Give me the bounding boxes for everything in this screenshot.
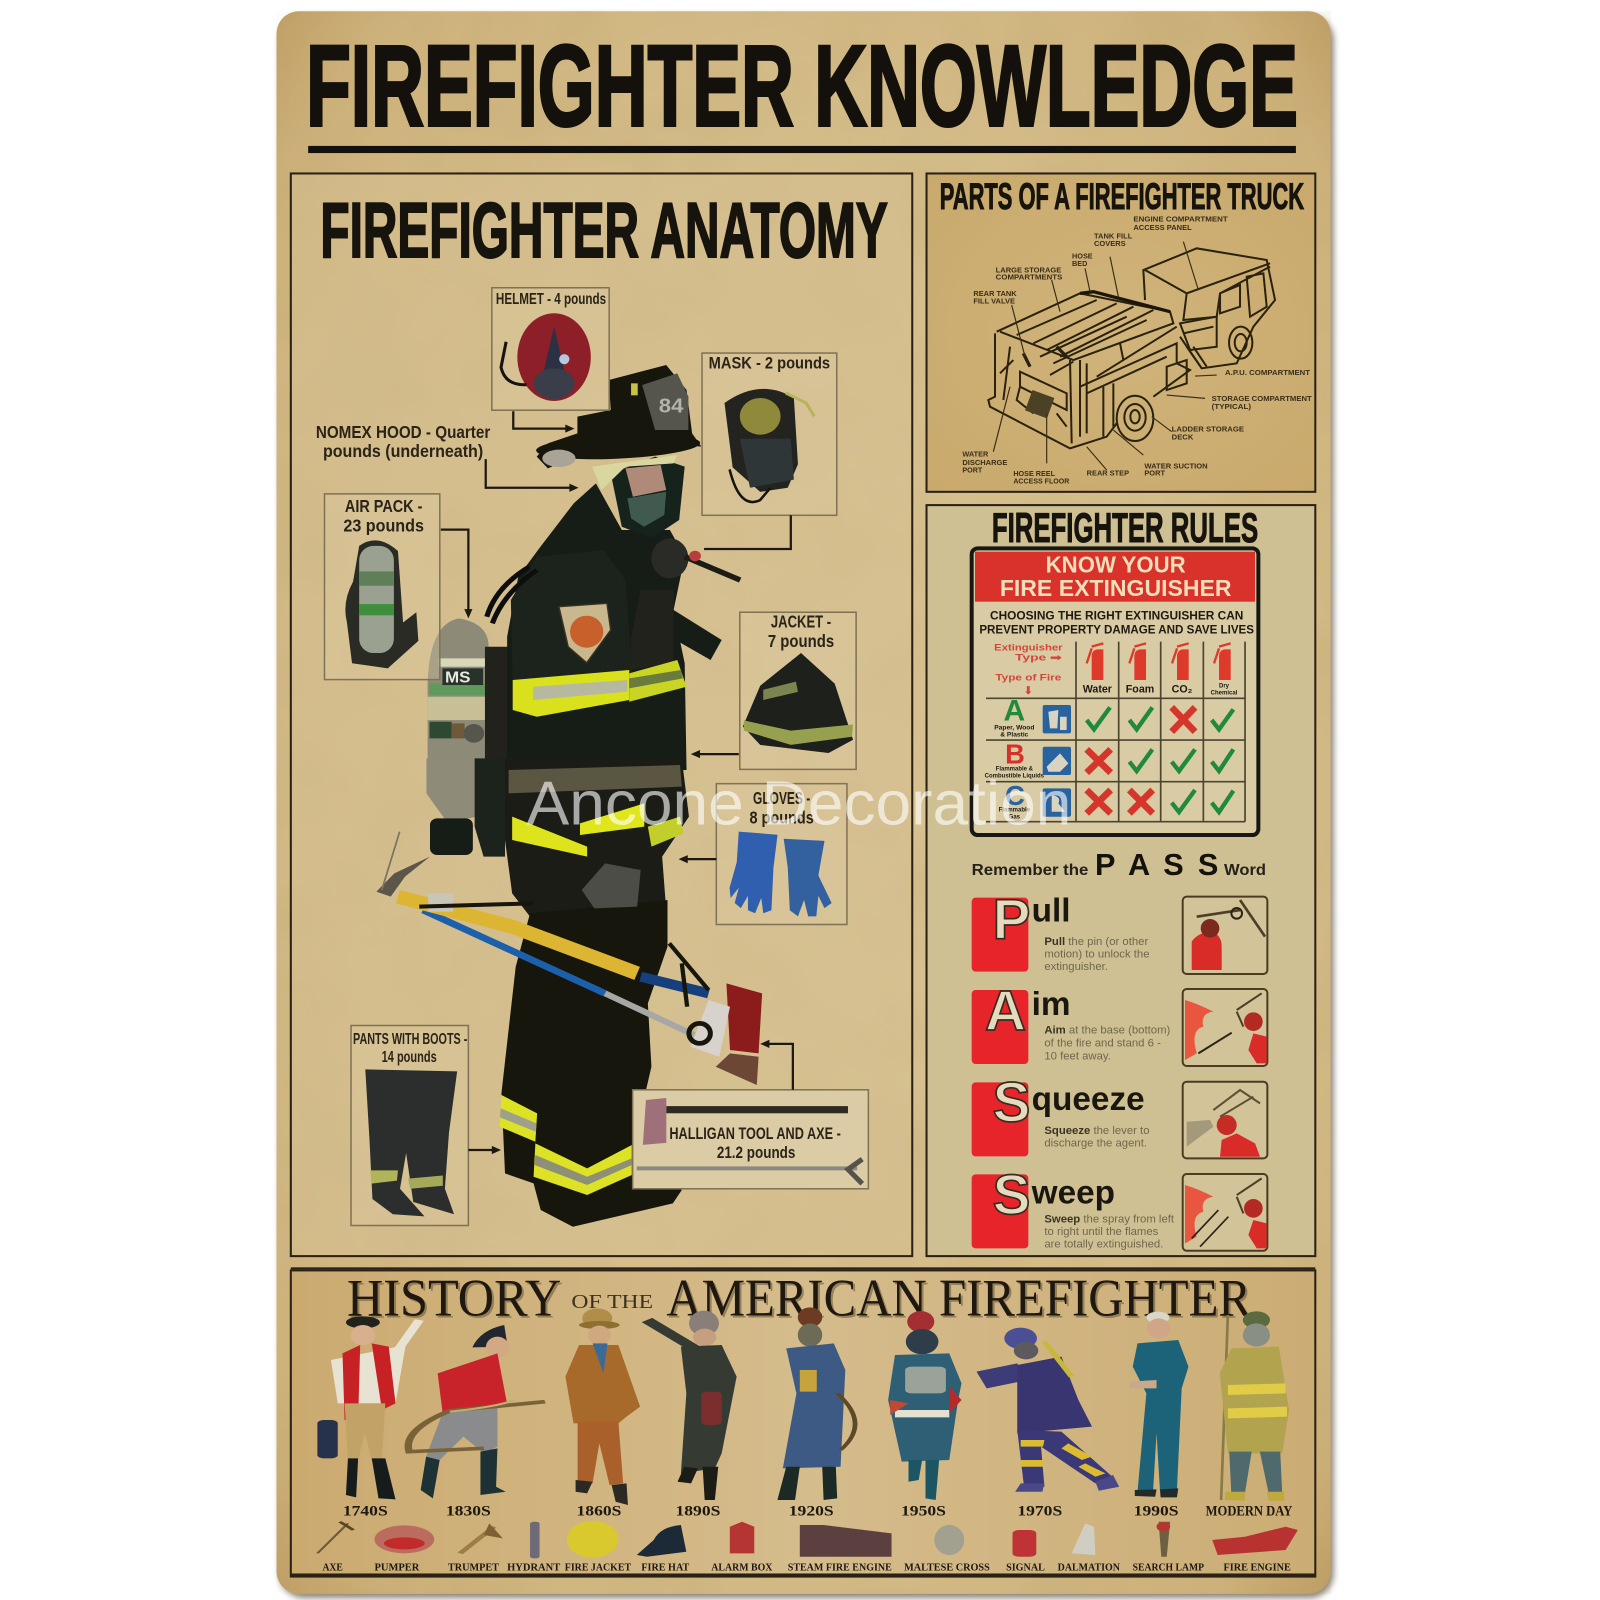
truck part labels: DECK: [1172, 432, 1194, 441]
chart grid: [986, 642, 1245, 822]
chart x marks: [1087, 707, 1195, 813]
artefact labels: FIRE HAT: [641, 1561, 689, 1573]
fire classes: [985, 695, 1045, 820]
truck part labels: TANK FILL: [1094, 231, 1133, 240]
nomex hood label: NOMEX HOOD - Quarter: [316, 422, 491, 442]
truck part labels: DISCHARGE: [962, 458, 1007, 467]
jacket inset: [740, 612, 856, 769]
decade labels: 1890S: [676, 1503, 720, 1519]
heading: history: OF THE: [571, 1291, 653, 1313]
nomex hood label: pounds (underneath): [323, 441, 483, 461]
air pack inset: [324, 494, 440, 680]
pull step: ull: [1032, 893, 1071, 930]
pass mnemonic section: [972, 848, 1267, 1251]
sweep step: weep: [1031, 1174, 1115, 1211]
truck part labels: REAR STEP: [1087, 469, 1129, 478]
chart subtitle: CHOOSING THE RIGHT EXTINGUISHER CAN: [990, 608, 1243, 622]
figure modern day: [1220, 1311, 1289, 1501]
truck part labels: COVERS: [1094, 239, 1126, 248]
tank base: [426, 758, 480, 823]
artefact labels: FIRE ENGINE: [1223, 1561, 1291, 1573]
helmet inset: [492, 288, 609, 410]
pull step: extinguisher.: [1044, 961, 1108, 973]
decade labels: MODERN DAY: [1206, 1503, 1293, 1519]
gloves inset: [716, 784, 847, 924]
fire classes: Flammable &: [996, 767, 1034, 773]
aim step: [972, 980, 1267, 1066]
halligan tool and axe inset: [633, 1090, 868, 1189]
gloves inset: GLOVES -: [753, 788, 810, 808]
callout arrows: [441, 411, 793, 1154]
jacket reflective bands: [513, 670, 629, 717]
chart subtitle: [979, 608, 1254, 636]
truck part labels: HOSE: [1072, 251, 1093, 260]
decade labels: [343, 1503, 1293, 1519]
pants with boots inset: [351, 1026, 468, 1226]
squeeze step: Squeeze the lever to: [1044, 1125, 1150, 1137]
watermark: Ancone Decoration: [527, 769, 1071, 838]
lower jacket: [501, 758, 689, 917]
chart check marks: [1087, 707, 1233, 812]
artefact labels: STEAM FIRE ENGINE: [788, 1561, 892, 1573]
truck part labels: PORT: [962, 465, 983, 474]
truck part labels: (TYPICAL): [1212, 402, 1252, 411]
decade labels: 1970S: [1017, 1503, 1062, 1519]
figure 1920s: [777, 1307, 855, 1500]
chart axis labels: Type of Fire: [995, 673, 1061, 683]
air hoses: [487, 567, 537, 623]
chart axis labels: ⬇: [1024, 685, 1033, 697]
panel: history of the american firefighter: [291, 1267, 1315, 1578]
trousers and boots: [501, 900, 682, 1227]
regulator and hose: [651, 538, 688, 578]
helmet: [537, 365, 701, 468]
decade labels: 1740S: [343, 1503, 388, 1519]
artefact labels: HYDRANT: [507, 1561, 560, 1573]
fire class icons: [1043, 705, 1071, 817]
jacket inset: JACKET -: [771, 612, 831, 632]
air pack inset: AIR PACK -: [345, 496, 423, 516]
truck part labels: ENGINE COMPARTMENT: [1133, 215, 1228, 224]
truck part labels: ACCESS PANEL: [1133, 223, 1192, 232]
decade labels: 1920S: [789, 1503, 834, 1519]
axe and halligan tool: [423, 910, 605, 993]
firefighter figure, upper body: MS: [445, 669, 471, 686]
mask inset: MASK - 2 pounds: [709, 354, 830, 372]
panel: parts of a firefighter truck: [927, 173, 1315, 492]
fire classes: C: [1005, 780, 1025, 811]
truck part labels: ACCESS FLOOR: [1013, 476, 1070, 485]
chart axis labels: Extinguisher: [994, 643, 1063, 653]
figure 1890s: [647, 1311, 737, 1500]
fire classes: A: [1004, 695, 1025, 728]
aim step: Aim at the base (bottom): [1044, 1024, 1171, 1036]
panel: firefighter rules: [927, 504, 1315, 1256]
small artefact icons: [317, 1521, 1298, 1558]
gloves inset: 8 pounds: [749, 807, 814, 827]
truck part labels: PORT: [1144, 469, 1166, 478]
heading: history: AMERICAN FIREFIGHTER: [668, 1271, 1254, 1329]
firefighter figure, upper body: 84: [659, 396, 684, 417]
figure 1860s: [565, 1308, 640, 1505]
helmet inset: HELMET - 4 pounds: [496, 291, 606, 308]
artefact labels: ALARM BOX: [711, 1561, 773, 1573]
air tank upper: [428, 618, 492, 770]
firefighter figure, upper body: [428, 365, 740, 770]
artefact labels: TRUMPET: [448, 1561, 499, 1573]
figure 1830s: [408, 1325, 545, 1498]
squeeze step: [972, 1072, 1267, 1158]
mask and hood: [611, 457, 685, 538]
halligan tool and axe inset: HALLIGAN TOOL AND AXE -: [669, 1125, 841, 1143]
sweep step: Sweep the spray from left: [1044, 1213, 1175, 1225]
extinguisher type labels: Dry: [1219, 683, 1230, 689]
heading: history: [347, 1269, 1254, 1329]
jacket inset: 7 pounds: [768, 631, 834, 651]
leg reflective bands: [500, 1095, 537, 1142]
panel: firefighter anatomy: [291, 173, 912, 1256]
pass heading: Remember the: [972, 862, 1088, 879]
decade labels: 1990S: [1134, 1503, 1179, 1519]
leader lines: [993, 242, 1217, 470]
aim step: 10 feet away.: [1044, 1050, 1111, 1062]
nomex hood label: [316, 422, 491, 461]
figure 1740s: [317, 1316, 419, 1499]
heading: truck: PARTS OF A FIREFIGHTER TRUCK: [940, 176, 1304, 217]
artefact labels: AXE: [322, 1561, 343, 1573]
extinguisher type labels: CO₂: [1172, 684, 1193, 696]
pull step: motion) to unlock the: [1044, 949, 1150, 961]
heading: rules: FIREFIGHTER RULES: [992, 504, 1258, 551]
extinguisher type labels: [1083, 683, 1238, 697]
extinguisher type labels: Water: [1083, 684, 1112, 696]
heading: history: AMERICAN FIREFIGHTER: [666, 1269, 1252, 1327]
squeeze step: discharge the agent.: [1044, 1138, 1147, 1150]
fire extinguisher chart: [972, 548, 1258, 835]
fire classes: Gas: [1009, 814, 1021, 820]
pants with boots inset: 14 pounds: [382, 1049, 437, 1066]
figure 1970s: [976, 1328, 1119, 1492]
pull step: Pull the pin (or other: [1044, 936, 1148, 948]
chart red header: [975, 552, 1255, 602]
metal plate background: [277, 11, 1334, 1598]
truck part labels: FILL VALVE: [973, 296, 1015, 305]
pass heading: [972, 848, 1266, 882]
pass heading: Word: [1224, 862, 1266, 879]
pants with boots inset: PANTS WITH BOOTS -: [353, 1031, 467, 1048]
mask inset: [702, 353, 837, 515]
truck part labels: LADDER STORAGE: [1172, 425, 1244, 434]
extinguisher type labels: Chemical: [1211, 691, 1238, 697]
helmet shield: [642, 373, 688, 430]
torso: [507, 483, 687, 770]
artefact labels: MALTESE CROSS: [904, 1561, 990, 1573]
artefact labels: [322, 1561, 1291, 1573]
pull step: [972, 888, 1267, 974]
truck part labels: [962, 215, 1312, 485]
chart axis labels: [994, 643, 1063, 697]
chart red header: FIRE EXTINGUISHER: [1000, 575, 1232, 601]
extinguisher icons: [1087, 643, 1231, 680]
heading: firefighter anatomy: FIREFIGHTER ANATOMY: [320, 188, 888, 274]
truck part labels: BED: [1072, 259, 1087, 268]
sweep step: to right until the flames: [1044, 1226, 1159, 1238]
fire classes: & Plastic: [1000, 732, 1029, 739]
glove: [582, 863, 641, 908]
firefighter figure, lower body: [376, 758, 762, 1227]
aim step: of the fire and stand 6 -: [1044, 1038, 1161, 1050]
artefact labels: DALMATION: [1058, 1561, 1120, 1573]
truck part labels: STORAGE COMPARTMENT: [1212, 394, 1312, 403]
fire classes: Combustible Liquids: [985, 774, 1045, 780]
figure 1950s: [888, 1311, 962, 1500]
fire classes: B: [1005, 738, 1025, 769]
truck part labels: COMPARTMENTS: [996, 272, 1062, 281]
artefact labels: FIRE JACKET: [565, 1561, 631, 1573]
truck part labels: LARGE STORAGE: [996, 265, 1061, 274]
squeeze step: S: [993, 1072, 1030, 1135]
decade labels: 1830S: [446, 1503, 491, 1519]
sweep step: S: [993, 1164, 1030, 1227]
sweep step: [972, 1164, 1267, 1251]
truck line diagram: [962, 215, 1312, 485]
shoulder patch: [559, 603, 611, 663]
heading: history: HISTORY: [349, 1271, 563, 1329]
radio: [670, 610, 722, 660]
truck part labels: WATER SUCTION: [1144, 461, 1208, 470]
figure 1990s: [1129, 1312, 1188, 1497]
axe head: [716, 1053, 759, 1085]
historical figures: [317, 1307, 1298, 1558]
air pack inset: 23 pounds: [343, 516, 424, 536]
truck part labels: REAR TANK: [973, 289, 1017, 298]
fire classes: Flammable: [999, 808, 1031, 814]
chart red header: KNOW YOUR: [1046, 552, 1186, 578]
pass heading: P A S S: [1095, 848, 1218, 882]
decade labels: 1860S: [577, 1503, 621, 1519]
truck part labels: A.P.U. COMPARTMENT: [1225, 368, 1311, 377]
fire classes: Paper, Wood: [994, 724, 1034, 731]
pull step: P: [993, 888, 1030, 951]
truck part labels: HOSE REEL: [1013, 469, 1056, 478]
truck part labels: WATER: [962, 450, 989, 459]
artefact labels: SIGNAL: [1006, 1561, 1045, 1573]
heading: history: HISTORY: [347, 1269, 561, 1327]
squeeze step: queeze: [1032, 1081, 1145, 1118]
extinguisher type labels: Foam: [1126, 684, 1154, 696]
waist bands: [512, 817, 587, 857]
aim step: A: [985, 980, 1026, 1043]
chart subtitle: PREVENT PROPERTY DAMAGE AND SAVE LIVES: [979, 622, 1254, 636]
halligan tool and axe inset: 21.2 pounds: [717, 1144, 795, 1162]
aim step: im: [1032, 986, 1071, 1023]
artefact labels: PUMPER: [374, 1561, 420, 1573]
decade labels: 1950S: [901, 1503, 946, 1519]
artefact labels: SEARCH LAMP: [1133, 1561, 1204, 1573]
chart axis labels: Type ➡: [1015, 653, 1062, 663]
sweep step: are totally extinguished.: [1044, 1238, 1163, 1250]
